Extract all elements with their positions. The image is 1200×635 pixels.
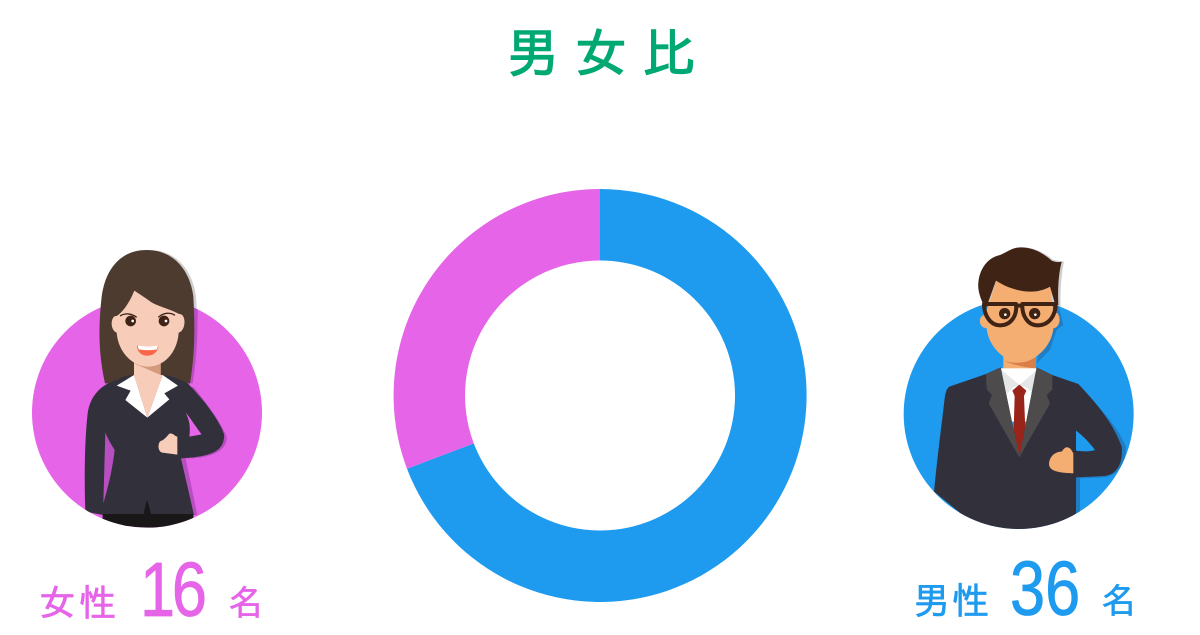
label: male count: 36: [1010, 545, 1080, 631]
label: male count: 名: [1101, 582, 1136, 621]
label: female count: 名: [228, 584, 263, 623]
donut chart: [394, 189, 807, 602]
illustration: businesswoman: [32, 250, 262, 534]
donut segment: male: [407, 189, 807, 602]
illustration: businessman: [904, 247, 1134, 533]
title: 男女比: [506, 25, 712, 84]
label: female count: [39, 546, 263, 632]
label: female count: 16: [140, 546, 207, 632]
label: female count: 女性: [39, 583, 119, 624]
label: male count: 男性: [913, 581, 991, 622]
label: male count: [913, 545, 1136, 631]
donut segment: female: [394, 189, 600, 469]
